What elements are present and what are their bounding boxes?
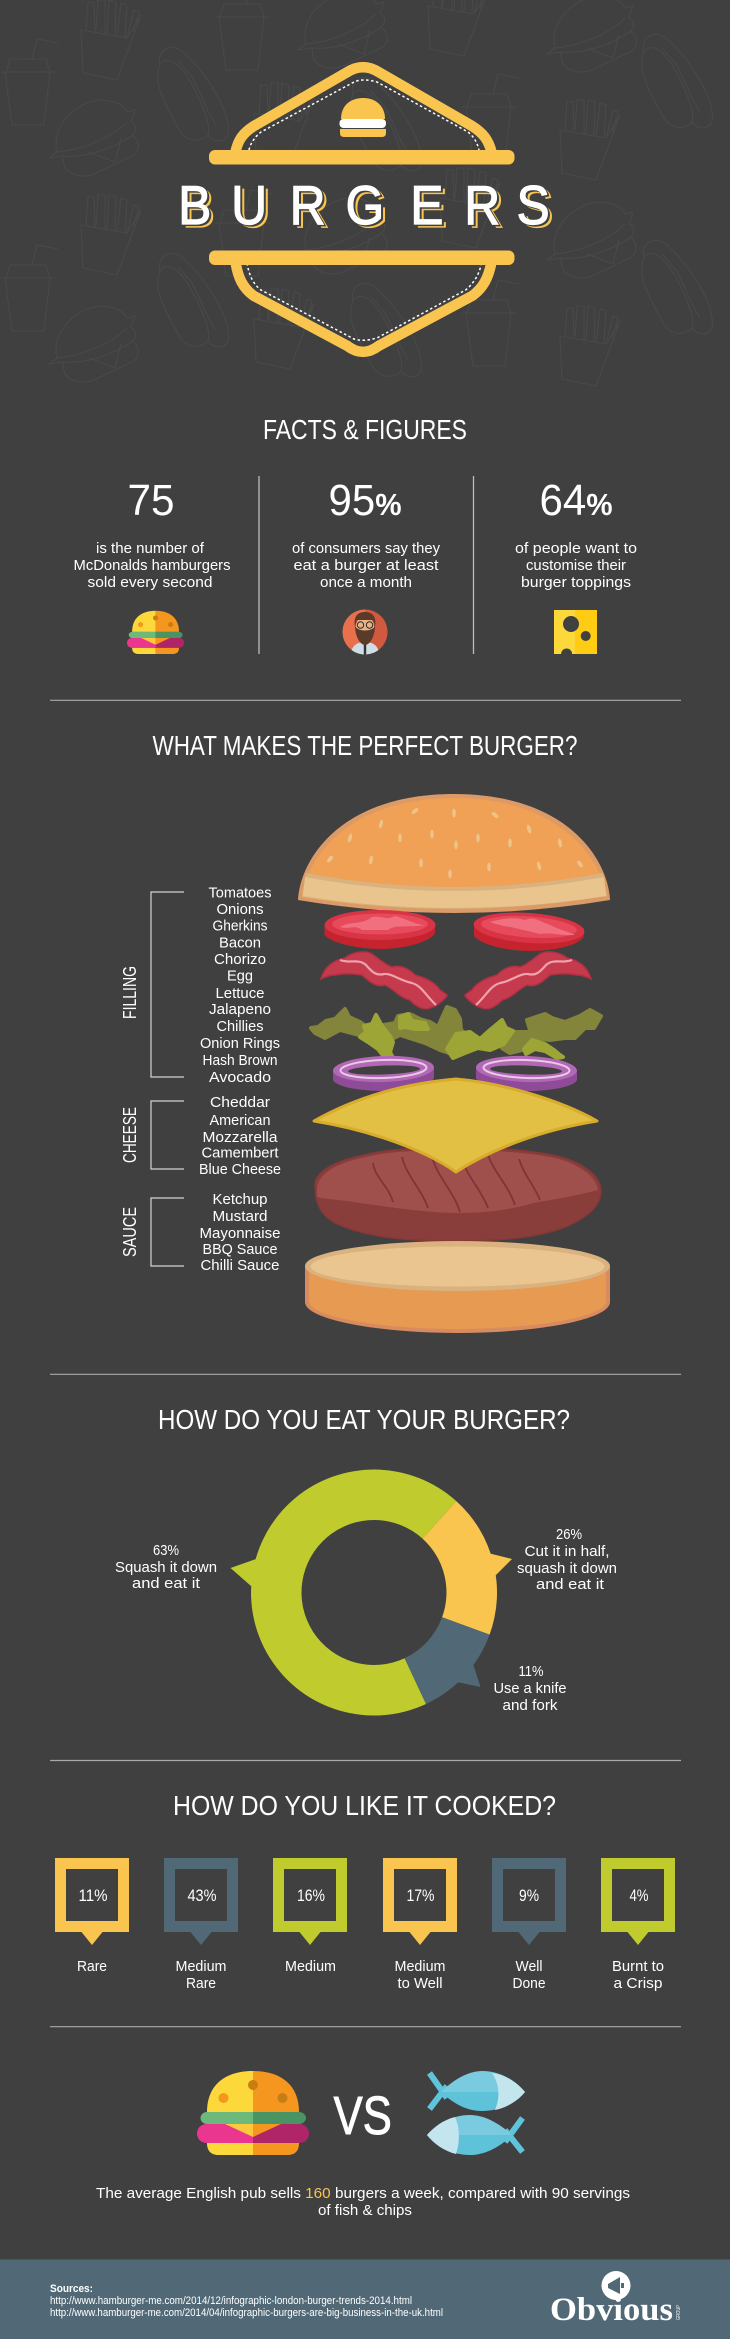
stat: 64%: burger toppings xyxy=(521,574,631,591)
filling list: Gherkins xyxy=(212,918,268,935)
sources xyxy=(50,2283,443,2319)
card: rare xyxy=(55,1858,129,1975)
card: medium rare xyxy=(164,1858,238,1992)
segment: 26% cut xyxy=(422,1501,497,1635)
stat: 64%: 64% xyxy=(540,476,612,525)
card: medium to well xyxy=(383,1858,457,1992)
donut chart xyxy=(230,1470,512,1716)
pointer: green xyxy=(230,1558,268,1586)
card: medium rare: Medium xyxy=(176,1958,226,1975)
card: medium to well: Medium xyxy=(394,1958,446,1975)
caption xyxy=(96,2185,630,2219)
cheese list xyxy=(199,1094,281,1178)
title: BURGERS xyxy=(182,179,554,240)
label: 11% xyxy=(494,1663,566,1714)
stat: 95%: 95% xyxy=(328,476,402,525)
filling list: Onions xyxy=(216,901,264,918)
sauce list: Mustard xyxy=(212,1208,268,1225)
sources: Sources: xyxy=(50,2283,93,2295)
cheese list: Camembert xyxy=(202,1144,279,1162)
card: medium: Medium xyxy=(285,1958,336,1975)
label: 26% xyxy=(517,1526,617,1593)
sources: http://www.hamburger-me.com/2014/12/infographic-london-burger-trends-2014.html xyxy=(50,2295,412,2307)
sauce list: BBQ Sauce xyxy=(202,1241,278,1258)
upper bar xyxy=(209,150,514,164)
sauce list: Chilli Sauce xyxy=(200,1257,280,1274)
filling list: Onion Rings xyxy=(200,1035,280,1052)
stat: 75 xyxy=(74,476,230,654)
card: burnt to a crisp xyxy=(601,1858,675,1992)
stat: 64%: customise their xyxy=(526,557,626,574)
filling list: Hash Brown xyxy=(202,1052,278,1069)
stat: 95%: of consumers say they xyxy=(292,540,440,557)
caption: The average English pub sells 160 burgers a week, compared with 90 servings xyxy=(96,2185,630,2202)
filling list: Egg xyxy=(227,968,253,984)
stat: 95% xyxy=(292,476,637,660)
card: burnt to a crisp: 4% xyxy=(630,1886,648,1905)
badge frame top xyxy=(236,67,492,152)
footer xyxy=(0,2260,730,2339)
bracket label: sauce: SAUCE xyxy=(120,1207,140,1257)
caption: of fish & chips xyxy=(318,2202,412,2219)
pointer: blue xyxy=(457,1664,480,1687)
filling list: Chillies xyxy=(216,1018,264,1035)
cheese slice xyxy=(314,1079,597,1172)
stat: 75: sold every second xyxy=(88,574,212,591)
stat: 75: McDonalds hamburgers xyxy=(74,557,230,574)
card: medium rare: 43% xyxy=(188,1886,216,1905)
tomato slices xyxy=(324,909,585,951)
title: BURGERS xyxy=(178,176,550,237)
badge frame bottom xyxy=(236,262,492,352)
pointer: yellow xyxy=(484,1553,512,1576)
title: BURGERS xyxy=(180,177,552,238)
stat: 95%: eat a burger at least xyxy=(294,557,439,574)
bracket label: cheese: CHEESE xyxy=(120,1107,140,1163)
logo: Obvious: GROUP xyxy=(676,2304,682,2320)
label: 26%: and eat it xyxy=(536,1576,605,1593)
bottom bun xyxy=(305,1241,610,1333)
segment: 11% knife xyxy=(405,1617,490,1704)
bracket label: filling: FILLING xyxy=(120,966,140,1019)
heading: HOW DO YOU EAT YOUR BURGER? xyxy=(158,1404,570,1435)
stat: 95%: once a month xyxy=(320,574,412,591)
background pattern: fast food outlines xyxy=(1,0,712,386)
filling list: Lettuce xyxy=(216,985,264,1002)
lower bar xyxy=(209,250,514,265)
card: well done xyxy=(492,1858,566,1992)
card: medium to well: to Well xyxy=(398,1975,442,1992)
filling list: Jalapeno xyxy=(209,1001,271,1018)
stat: 75: is the number of xyxy=(96,540,205,557)
label: 63% xyxy=(115,1542,217,1592)
filling list: Avocado xyxy=(209,1069,271,1086)
sources: http://www.hamburger-me.com/2014/04/infographic-burgers-are-big-business-in-the-uk.html xyxy=(50,2307,443,2319)
sauce list: Ketchup xyxy=(212,1191,268,1208)
section: burgers vs fish xyxy=(96,2071,630,2219)
icon: cheese xyxy=(554,610,597,654)
section: how do you eat your burger xyxy=(115,1404,617,1716)
filling list: Bacon xyxy=(219,935,261,952)
ingredient brackets xyxy=(151,892,184,1266)
heading: FACTS & FIGURES xyxy=(263,414,467,445)
icon: burger xyxy=(197,2071,309,2155)
sauce list xyxy=(200,1191,280,1274)
illustration: exploded burger xyxy=(298,794,610,1333)
label: 11%: Use a knife xyxy=(494,1680,566,1697)
icon: fish bottom xyxy=(427,2115,522,2155)
card: well done: 9% xyxy=(519,1886,539,1905)
top bun xyxy=(298,794,610,913)
label: 11%: and fork xyxy=(502,1697,558,1714)
icon: fish top xyxy=(430,2071,525,2111)
card: medium rare: Rare xyxy=(186,1975,216,1992)
label: 26%: 26% xyxy=(556,1526,582,1543)
card: rare: Rare xyxy=(77,1958,107,1975)
stat: 64% xyxy=(515,476,637,660)
dotted inner line bottom xyxy=(247,263,481,340)
beef patty xyxy=(315,1147,601,1241)
label: 63%: Squash it down xyxy=(115,1559,217,1576)
stat: 75: 75 xyxy=(128,476,174,525)
sauce list: Mayonnaise xyxy=(200,1225,280,1242)
cheese list: Mozzarella xyxy=(202,1129,278,1146)
logo: Obvious xyxy=(550,2271,682,2328)
logo: Obvious: Obvious xyxy=(550,2292,673,2328)
VS label: VS xyxy=(334,2085,392,2146)
icon: mini burger xyxy=(340,98,386,137)
label: 63%: 63% xyxy=(153,1542,179,1559)
dotted inner line top xyxy=(249,80,479,150)
card: well done: Done xyxy=(512,1975,546,1992)
heading: WHAT MAKES THE PERFECT BURGER? xyxy=(152,730,578,761)
card: burnt to a crisp: Burnt to xyxy=(612,1958,664,1975)
section: how do you like it cooked xyxy=(55,1790,675,1992)
card: medium xyxy=(273,1858,347,1975)
icon: burger xyxy=(127,611,184,654)
label: 63%: and eat it xyxy=(132,1575,201,1592)
bacon strips xyxy=(321,952,591,1009)
label: 11%: 11% xyxy=(518,1663,544,1680)
heading: HOW DO YOU LIKE IT COOKED? xyxy=(173,1790,556,1821)
onion rings xyxy=(333,1054,577,1091)
label: 26%: Cut it in half, xyxy=(524,1543,610,1560)
card: medium: 16% xyxy=(297,1886,325,1905)
section: perfect burger xyxy=(120,730,610,1333)
card: rare: 11% xyxy=(78,1886,108,1905)
logo badge xyxy=(178,67,554,352)
lettuce xyxy=(311,1007,601,1058)
cheese list: Blue Cheese xyxy=(199,1161,281,1178)
cheese list: American xyxy=(210,1112,270,1129)
filling list: Chorizo xyxy=(214,951,266,968)
filling list: Tomatoes xyxy=(208,885,272,902)
card: medium to well: 17% xyxy=(406,1886,434,1905)
card: burnt to a crisp: a Crisp xyxy=(614,1975,662,1992)
icon: bearded man xyxy=(342,609,388,655)
segment: 63% squash xyxy=(251,1470,456,1716)
filling list xyxy=(200,885,280,1086)
card: well done: Well xyxy=(516,1958,542,1975)
cheese list: Cheddar xyxy=(210,1094,270,1111)
stat: 64%: of people want to xyxy=(515,540,637,557)
label: 26%: squash it down xyxy=(517,1560,617,1577)
